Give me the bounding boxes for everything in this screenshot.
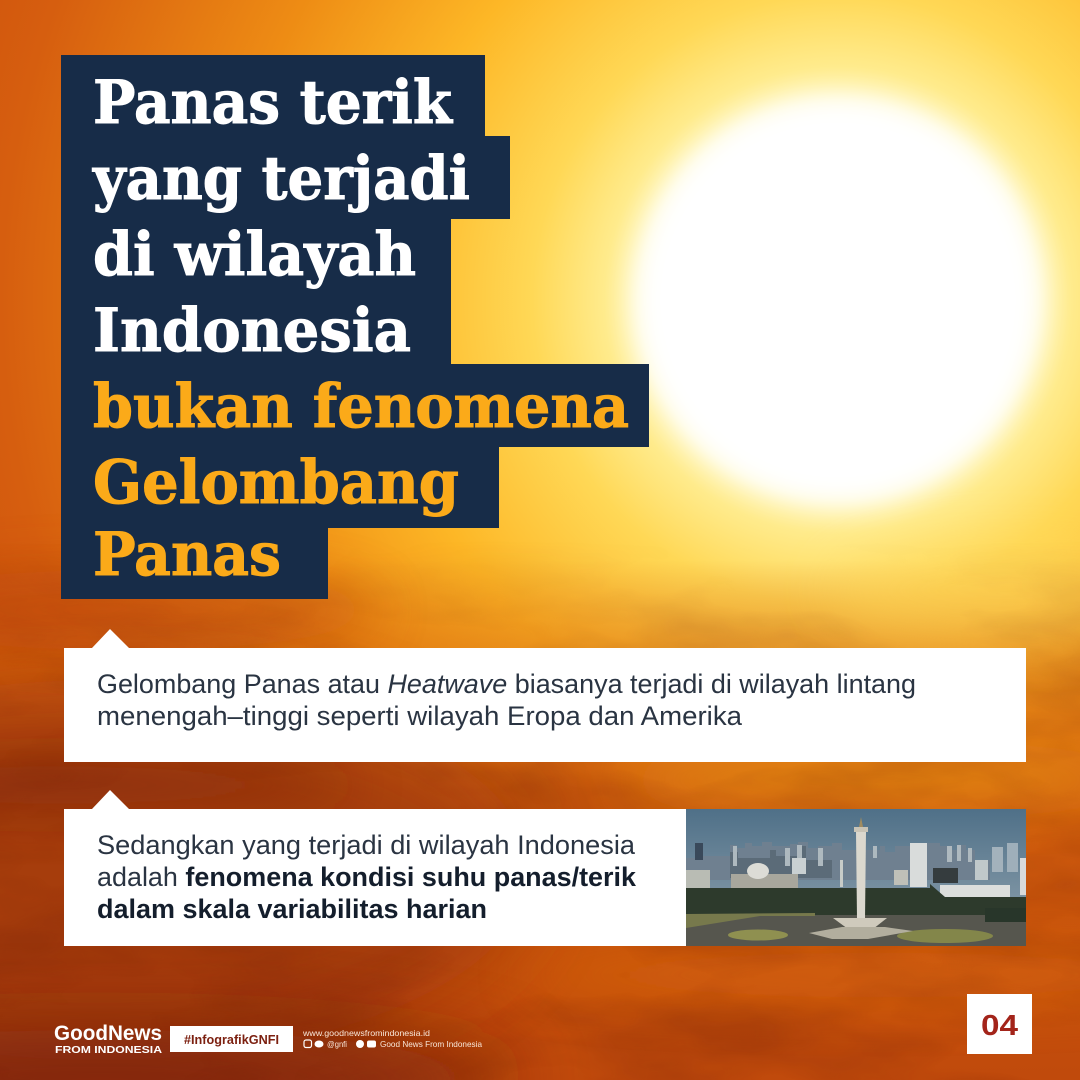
panel text: menengah–tinggi seperti wilayah Eropa dan Amerika: [97, 701, 743, 731]
icon: instagram: [304, 1040, 312, 1048]
monument: [856, 832, 866, 919]
sun disc: [635, 97, 1041, 503]
icon: twitter: [314, 1040, 324, 1048]
footer website and social links: [302, 1028, 482, 1049]
page number: 04: [981, 1010, 1018, 1042]
panel text: dalam skala variabilitas harian: [97, 894, 487, 924]
title orange lines: Panas: [93, 520, 281, 590]
distant skyline: [686, 842, 990, 880]
logo subline: FROM INDONESIA: [55, 1044, 162, 1056]
title orange lines: [93, 372, 629, 590]
title white lines: Indonesia: [93, 296, 411, 366]
panel text: Gelombang Panas atau Heatwave biasanya terjadi di wilayah lintang: [97, 669, 916, 699]
panel text: Sedangkan yang terjadi di wilayah Indonesia: [97, 830, 636, 860]
title white lines: [92, 68, 470, 366]
photo: Monas monument and Jakarta skyline: [686, 809, 1026, 946]
dome building: [731, 874, 798, 888]
panel: heatwave explanation: [64, 629, 1026, 762]
ground: [686, 915, 1026, 946]
title orange lines: bukan fenomena: [93, 372, 629, 442]
hashtag badge: #InfografikGNFI: [184, 1033, 279, 1047]
footer website and social links: www.goodnewsfromindonesia.id: [302, 1028, 430, 1038]
title orange lines: Gelombang: [93, 448, 459, 518]
title white lines: Panas terik: [93, 68, 453, 138]
footer website and social links: @gnfi: [327, 1039, 347, 1049]
panel: Indonesia explanation: [64, 790, 686, 946]
panel pointer and box: [64, 629, 1026, 762]
icon: facebook: [356, 1040, 364, 1048]
trees: [686, 884, 1026, 915]
page number: [967, 994, 1032, 1054]
logo wordmark: GoodNews: [54, 1022, 162, 1045]
title white lines: di wilayah: [93, 220, 416, 290]
title block: [61, 55, 649, 599]
footer logo: [54, 1022, 162, 1056]
panel pointer and box: [64, 790, 686, 946]
hashtag badge: [170, 1026, 293, 1052]
title background panel: [61, 55, 649, 599]
footer website and social links: Good News From Indonesia: [380, 1039, 482, 1049]
title white lines: yang terjadi: [92, 144, 470, 214]
cloud texture: [0, 540, 1080, 1080]
panel text: [97, 830, 637, 924]
panel text: adalah fenomena kondisi suhu panas/terik: [97, 862, 637, 892]
buildings: [695, 843, 703, 860]
icon: youtube: [367, 1040, 376, 1048]
panel text: [97, 669, 916, 731]
